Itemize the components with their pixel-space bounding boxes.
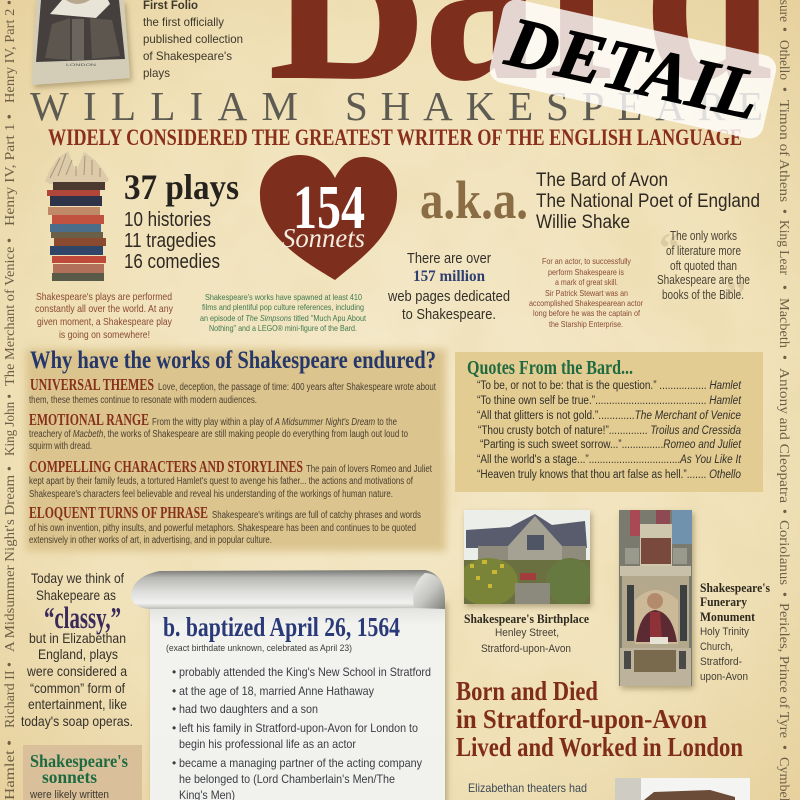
text: today we think classy: Shakepeare as bbox=[36, 587, 116, 603]
stat: 37 plays: 11 tragedies bbox=[124, 230, 216, 252]
left border: play titles: Henry IV, Part 1 • bbox=[3, 114, 18, 226]
note: pop culture: Shakespeare's works have spawned at least 410 bbox=[205, 292, 362, 302]
portrait engraving: LONDON bbox=[66, 63, 97, 67]
photo: birthplace bbox=[458, 510, 594, 606]
photo caption: monument: Church, bbox=[700, 641, 733, 653]
note: only works quoted more bbox=[657, 226, 750, 320]
left border: play titles: Henry IV, Part 2 • bbox=[3, 0, 18, 103]
photo caption: monument bbox=[700, 581, 770, 683]
stat: 37 plays: 16 comedies bbox=[124, 251, 220, 273]
photo caption: birthplace: Henley Street, bbox=[495, 627, 559, 639]
scroll heading: b. baptized April 26, 1564 bbox=[163, 612, 400, 642]
note: only works quoted more: “ bbox=[659, 226, 680, 272]
detail stamp: DETAIL bbox=[499, 3, 766, 135]
right border: play titles: • bbox=[776, 209, 791, 214]
text: today we think classy: England, plays bbox=[38, 646, 118, 662]
quote list: “Heaven truly knows that thou art false as hell.”....... Othello bbox=[477, 469, 742, 481]
right border: play titles: • bbox=[776, 355, 791, 360]
biography list: • bbox=[172, 702, 176, 716]
note: performed constantly: is going on somewhere! bbox=[59, 329, 150, 341]
photo: funerary monument bbox=[619, 510, 692, 686]
left border: play titles: The Merchant of Venice • bbox=[3, 238, 18, 386]
text: emotional range: treachery of Macbeth, the works of Shakespeare are still making people do everything from laugh out loud to bbox=[29, 429, 408, 440]
note: Patrick Stewart: accomplished Shakespearean actor bbox=[529, 298, 643, 308]
note: only works quoted more: Shakespeare are the bbox=[657, 272, 750, 287]
heading: born and died bbox=[456, 676, 743, 762]
note: pop culture: an episode of The Simpsons titled "Much Apu About bbox=[200, 313, 367, 323]
panel: sonnets note bbox=[23, 745, 142, 800]
left border: play titles: Hamlet • bbox=[3, 740, 18, 800]
note: only works quoted more: ” bbox=[725, 274, 746, 320]
note: performed constantly: given moment, a Shakespeare play bbox=[37, 316, 173, 328]
biography list: had two daughters and a son bbox=[179, 702, 318, 716]
text: emotional range: From the witty play within a play of A Midsummer Night's Dream to the bbox=[152, 417, 397, 428]
text: universal themes: them, these themes continue to resonate with modern audiences. bbox=[29, 395, 257, 406]
text: universal themes bbox=[29, 375, 436, 406]
text: eloquent turns of phrase: ELOQUENT TURNS OF PHRASE bbox=[29, 503, 208, 522]
right border: play titles: • bbox=[776, 285, 791, 290]
quote list: “All that glitters is not gold.”.............The Merchant of Venice bbox=[477, 410, 741, 422]
right border: play titles: Timon of Athens bbox=[776, 100, 791, 202]
biography list: left his family in Stratford-upon-Avon for London to bbox=[179, 721, 418, 735]
First Folio caption bbox=[143, 0, 243, 80]
note: performed constantly: Shakespeare's plays are performed bbox=[36, 291, 172, 303]
nicknames: The National Poet of England bbox=[536, 191, 760, 212]
note: Patrick Stewart: the Starship Enterprise. bbox=[549, 319, 623, 329]
text: compelling characters: Shakespeare's characters feel believable and reveal his understanding of the workings of human nature. bbox=[29, 489, 393, 500]
note: pop culture: Nothing" and a LEGO® mini-figure of the Bard. bbox=[209, 323, 357, 333]
stat: 157 million web pages: to Shakespeare. bbox=[402, 306, 496, 323]
stat: 157 million web pages: 157 million bbox=[413, 268, 485, 285]
quote list: “Thou crusty botch of nature!”.............. Troilus and Cressida bbox=[478, 425, 741, 437]
scroll paper bbox=[150, 600, 445, 800]
text: universal themes: UNIVERSAL THEMES bbox=[30, 375, 154, 394]
right border: play titles: Coriolanus bbox=[776, 520, 791, 585]
text: eloquent turns of phrase bbox=[29, 503, 421, 546]
text: today we think classy: were considered a bbox=[26, 663, 127, 679]
name: William Shakespeare: SHAKESPEARE bbox=[345, 83, 763, 129]
icon: stack of books bbox=[45, 151, 109, 281]
right border: play titles: • bbox=[776, 745, 791, 750]
text: compelling characters: The pain of lovers Romeo and Juliet bbox=[306, 464, 432, 475]
biography list bbox=[172, 665, 431, 800]
right border: play titles: Pericles, Prince of Tyre bbox=[776, 603, 791, 738]
heart: 154 sonnets bbox=[260, 155, 397, 280]
First Folio caption: published collection bbox=[143, 32, 243, 46]
quote list: “All the world's a stage...”.................................As You Like It bbox=[477, 454, 742, 466]
text: today we think classy bbox=[21, 570, 133, 729]
note: Patrick Stewart: long before he was the captain of bbox=[533, 308, 641, 318]
photo caption: birthplace: Shakespeare's Birthplace bbox=[464, 612, 589, 626]
scroll subheading: (exact birthdate unknown, celebrated as April 23) bbox=[166, 643, 352, 654]
note: only works quoted more: of literature more bbox=[666, 243, 741, 258]
text: compelling characters: COMPELLING CHARACTERS AND STORYLINES bbox=[29, 457, 303, 476]
photo caption: monument: Holy Trinity bbox=[700, 626, 749, 638]
right border: play titles: King Lear bbox=[776, 220, 791, 275]
photo caption: birthplace: Stratford-upon-Avon bbox=[481, 643, 571, 655]
quote list: “To be, or not to be: that is the question.” ................. Hamlet bbox=[477, 380, 742, 392]
text: universal themes: Love, deception, the passage of time: 400 years after Shakespeare wrote about bbox=[158, 382, 436, 393]
note: performed constantly: constantly all over the world. At any bbox=[35, 303, 174, 315]
biography list: he belonged to (Lord Chamberlain's Men/The bbox=[179, 772, 395, 786]
left border: play titles: Richard II • bbox=[3, 662, 18, 728]
note: pop culture bbox=[200, 292, 367, 333]
nicknames bbox=[536, 170, 760, 233]
heading: born and died: Lived and Worked in London bbox=[456, 732, 743, 762]
photo caption: monument: Monument bbox=[700, 610, 756, 624]
scroll top roll bbox=[131, 570, 445, 609]
text: eloquent turns of phrase: extensively in other works of art, in advertising, and in popular culture. bbox=[29, 535, 272, 546]
text: today we think classy: today's soap operas. bbox=[21, 713, 133, 729]
heart: 154 sonnets: 154 bbox=[293, 174, 365, 242]
name: William Shakespeare: WILLIAM bbox=[30, 83, 298, 129]
stat: 37 plays: 37 plays bbox=[124, 167, 239, 207]
note: only works quoted more: oft quoted than bbox=[670, 258, 737, 273]
note: Patrick Stewart: a mark of great skill. bbox=[555, 277, 618, 287]
biography list: • bbox=[172, 756, 176, 770]
name: William Shakespeare bbox=[30, 83, 763, 129]
panel: why the works endured bbox=[26, 347, 446, 551]
note: Patrick Stewart bbox=[529, 256, 643, 329]
text: eloquent turns of phrase: Shakespeare's writings are full of catchy phrases and words bbox=[212, 510, 421, 521]
First Folio caption: the first officially bbox=[143, 15, 224, 29]
right border: play titles: • bbox=[776, 87, 791, 92]
photo caption: birthplace bbox=[464, 612, 589, 655]
quote list bbox=[477, 380, 742, 481]
stat: 157 million web pages: web pages dedicated bbox=[387, 288, 510, 305]
right border: play titles: • bbox=[776, 592, 791, 597]
stat: 157 million web pages bbox=[387, 250, 510, 323]
right border: play titles bbox=[776, 0, 791, 800]
stat: 37 plays: 10 histories bbox=[124, 209, 211, 231]
right border: play titles: • bbox=[776, 27, 791, 32]
heart: 154 sonnets: Sonnets bbox=[282, 223, 365, 253]
text: today we think classy: but in Elizabethan bbox=[29, 630, 126, 646]
note: pop culture: films and plentiful pop culture references, including bbox=[202, 302, 364, 312]
quote list: “To thine own self be true.”........................................ Hamlet bbox=[477, 395, 742, 407]
heading: quotes: Quotes From the Bard... bbox=[467, 357, 633, 379]
note: Elizabethan theaters: Elizabethan theaters had bbox=[468, 781, 587, 795]
biography list: probably attended the King's New School in Stratford bbox=[179, 665, 431, 679]
photo caption: monument: Funerary bbox=[700, 595, 748, 609]
quote list: “Parting is such sweet sorrow...”...............Romeo and Juliet bbox=[480, 439, 742, 451]
nicknames: The Bard of Avon bbox=[536, 170, 668, 191]
biography list: • bbox=[172, 665, 176, 679]
First Folio caption: of Shakespeare's bbox=[143, 49, 232, 63]
note: Patrick Stewart: Sir Patrick Stewart was an bbox=[545, 288, 628, 298]
left border: play titles bbox=[3, 0, 18, 800]
right border: play titles: Antony and Cleopatra bbox=[776, 368, 791, 504]
text: today we think classy: “common” form of bbox=[30, 680, 125, 696]
biography list: became a managing partner of the acting company bbox=[179, 756, 422, 770]
note: Patrick Stewart: For an actor, to successfully bbox=[542, 256, 632, 266]
text: emotional range: squirm with dread. bbox=[29, 441, 92, 452]
right border: play titles: Macbeth bbox=[776, 298, 791, 348]
stat: 37 plays bbox=[124, 167, 239, 273]
heading: why have the works endured: Why have the works of Shakespeare endured? bbox=[30, 347, 436, 374]
biography list: at the age of 18, married Anne Hathaway bbox=[179, 684, 374, 698]
biography list: • bbox=[172, 684, 176, 698]
portrait engraving bbox=[32, 0, 130, 85]
panel: quotes from the Bard bbox=[455, 352, 763, 492]
biography list: • bbox=[172, 721, 176, 735]
left border: play titles: King John • bbox=[3, 394, 18, 456]
text: today we think classy: Today we think of bbox=[31, 570, 124, 586]
a.k.a.: a.k.a. bbox=[420, 170, 528, 230]
stat: 157 million web pages: There are over bbox=[407, 250, 491, 267]
note: performed constantly bbox=[35, 291, 174, 341]
panel: sonnets note: sonnets bbox=[42, 767, 97, 787]
text: emotional range bbox=[29, 410, 408, 452]
left border: play titles: A Midsummer Night's Dream • bbox=[3, 466, 18, 652]
heading: born and died: Born and Died bbox=[456, 676, 598, 706]
panel: biography scroll bbox=[131, 570, 445, 800]
right border: play titles: • bbox=[776, 509, 791, 514]
text: eloquent turns of phrase: of his own invention, pithy insults, and powerful metaphors. Shakespeare has been and continues to be quoted bbox=[29, 523, 416, 534]
note: only works quoted more: The only works bbox=[670, 228, 737, 243]
photo: theater bbox=[615, 778, 750, 800]
right border: play titles: Othello bbox=[776, 40, 791, 80]
First Folio caption: plays bbox=[143, 66, 170, 80]
panel: sonnets note: Shakespeare's bbox=[30, 751, 128, 771]
text: today we think classy: entertainment, like bbox=[28, 696, 127, 712]
text: compelling characters bbox=[29, 457, 432, 500]
text: emotional range: EMOTIONAL RANGE bbox=[29, 410, 149, 429]
note: Patrick Stewart: perform Shakespeare is bbox=[548, 267, 624, 277]
text: today we think classy: “classy,” bbox=[44, 600, 121, 635]
photo caption: monument: Shakespeare's bbox=[700, 581, 770, 595]
note: only works quoted more: books of the Bible. bbox=[662, 287, 744, 302]
photo caption: monument: upon-Avon bbox=[700, 671, 748, 683]
nicknames: Willie Shake bbox=[536, 212, 630, 233]
text: compelling characters: kept apart by their family feuds, a tortured Hamlet's quest to avenge his father... the actions and motivations of bbox=[29, 476, 413, 487]
heading: born and died: in Stratford-upon-Avon bbox=[456, 704, 707, 734]
biography list: begin his professional life as an actor bbox=[179, 737, 356, 751]
photo caption: monument: Stratford- bbox=[700, 656, 742, 668]
